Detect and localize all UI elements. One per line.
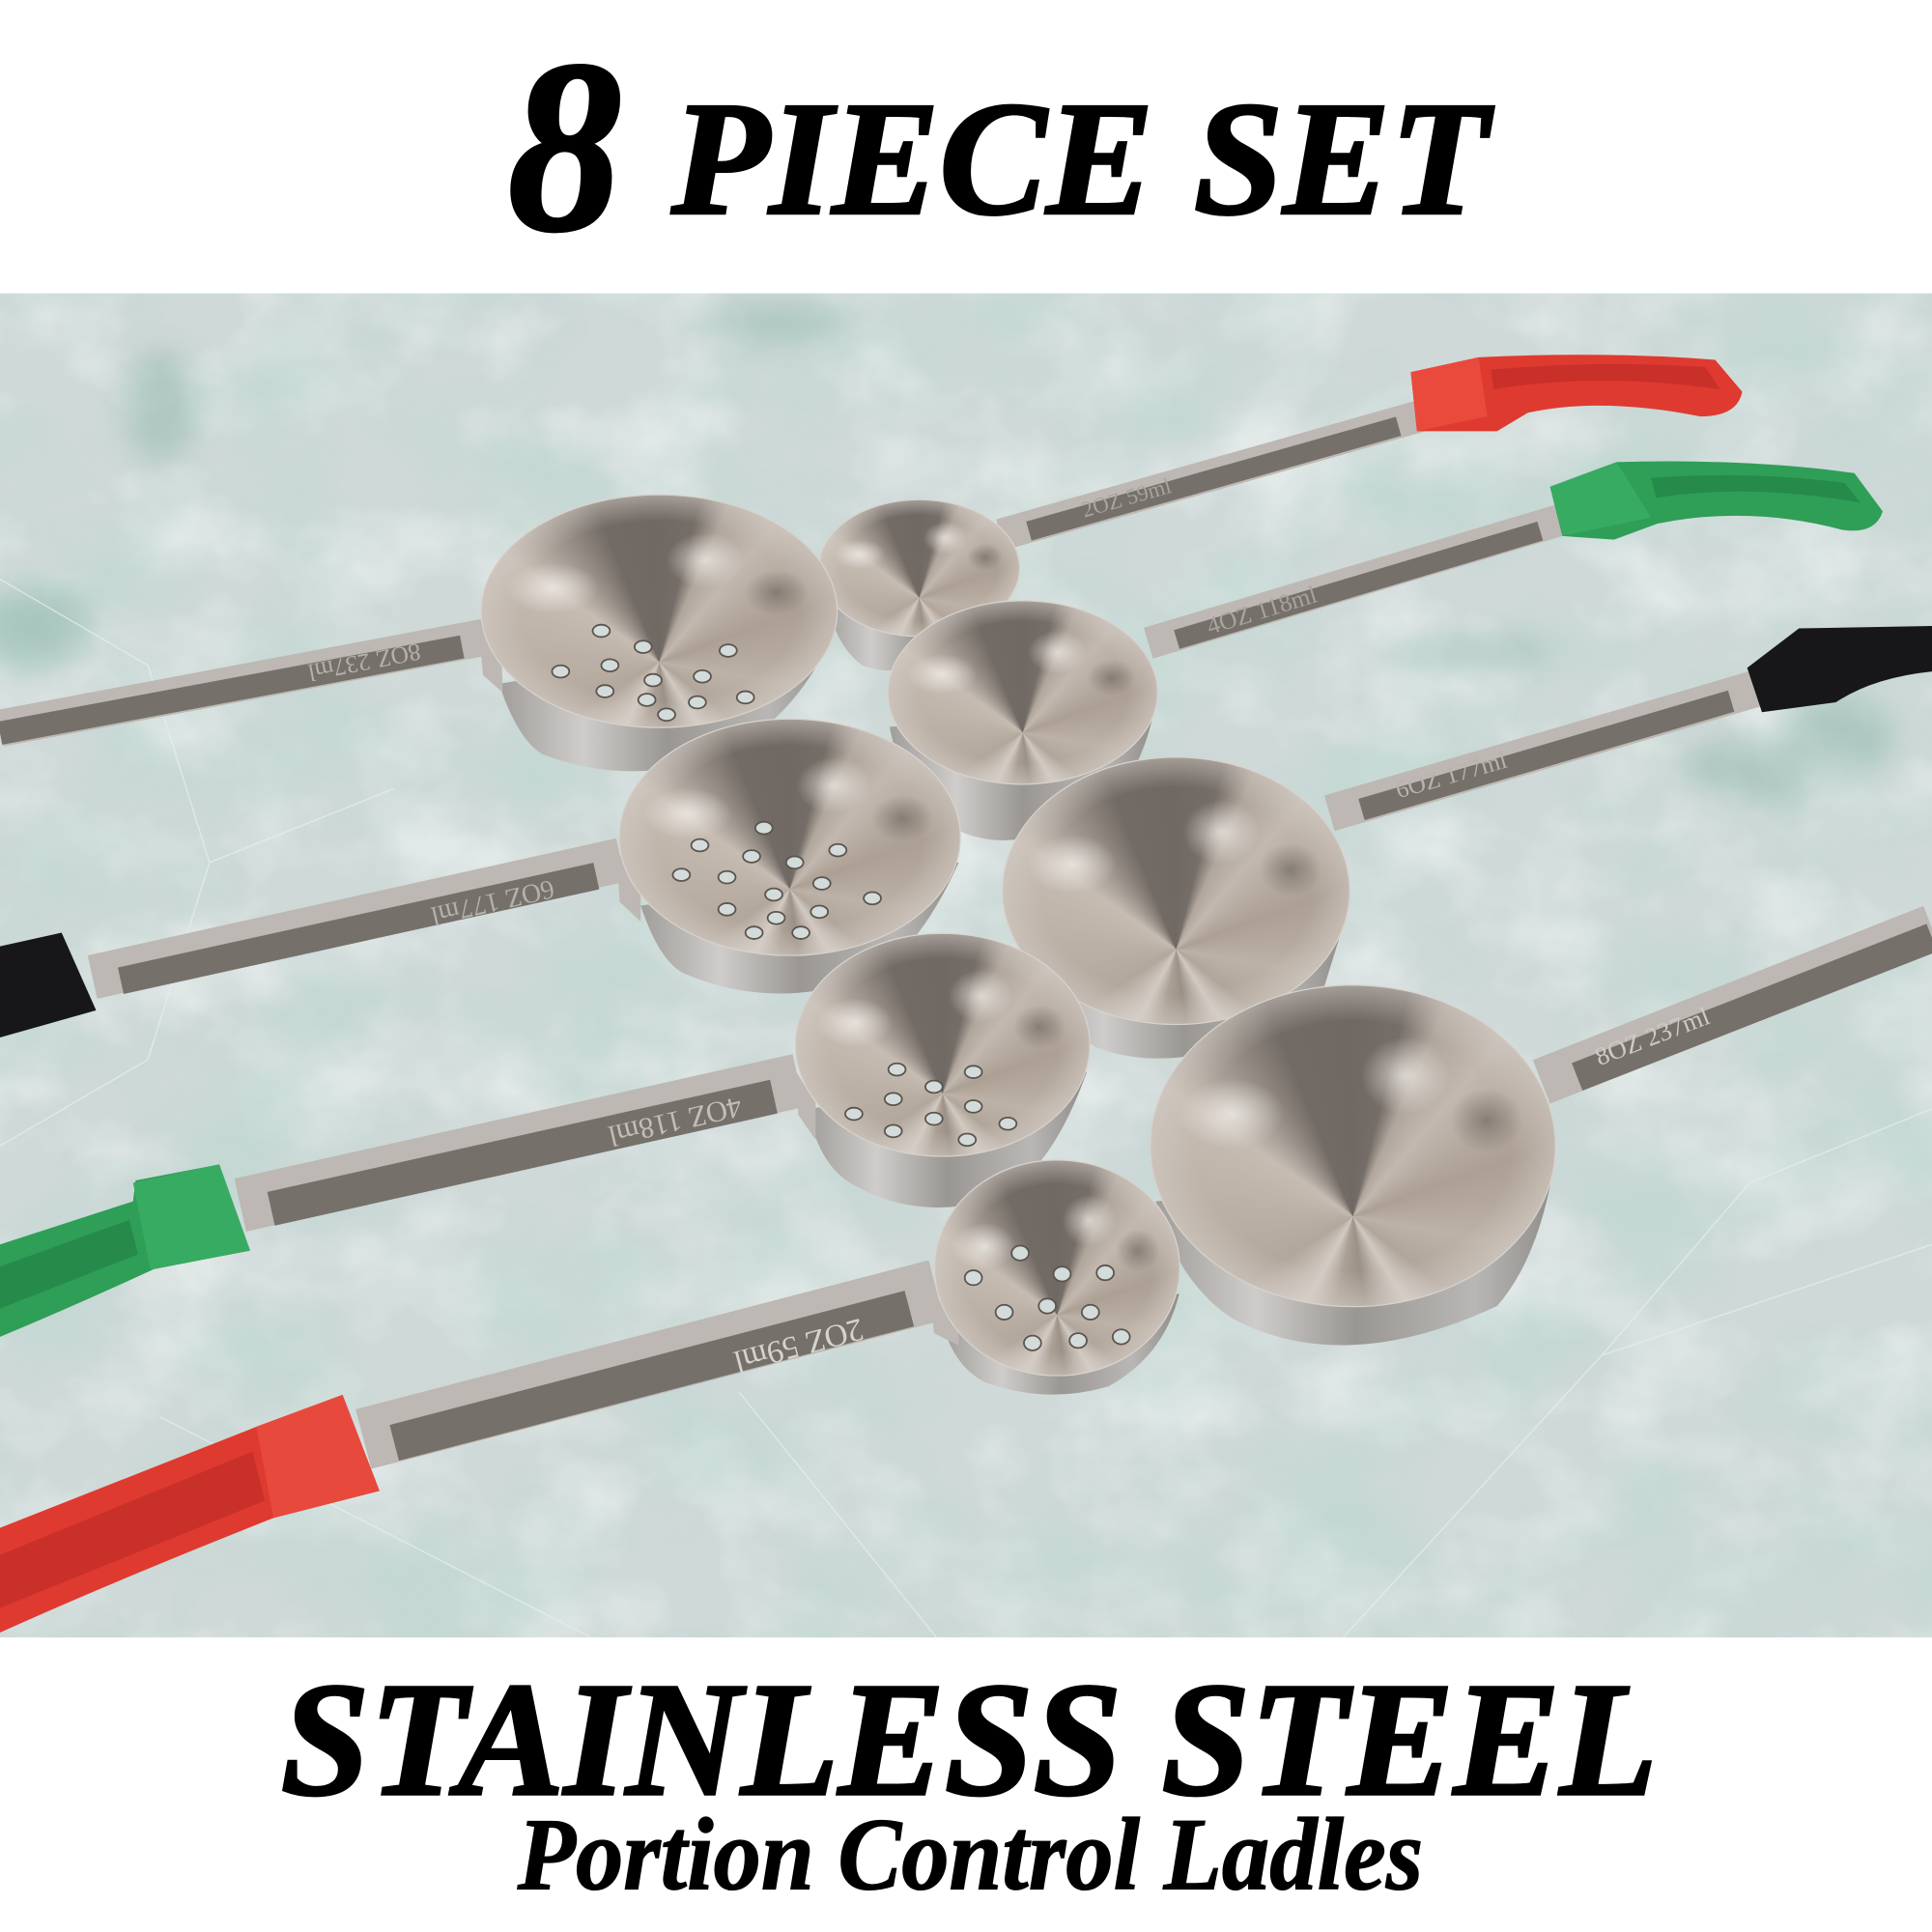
ladle: 2oz perforated, red handle	[0, 1159, 1180, 1633]
perforations	[552, 625, 754, 721]
perforations	[845, 1064, 1016, 1146]
perforations	[672, 822, 881, 939]
bowl body	[943, 1293, 1179, 1395]
subheading: portion control ladles: Portion Control Ladles	[517, 1798, 1423, 1912]
grip	[0, 933, 96, 1037]
ladle: 6oz solid, black handle	[1002, 626, 1932, 1059]
perforations	[965, 1246, 1130, 1350]
ladle: 4oz solid, green handle	[887, 462, 1883, 840]
ladle: 2oz solid, red handle	[818, 355, 1743, 670]
engraving: 6OZ 177ml	[1392, 746, 1510, 804]
bowl	[887, 600, 1158, 784]
bowl	[818, 499, 1020, 637]
bracket	[478, 622, 502, 693]
engraving: 2OZ 59ml	[1079, 473, 1174, 523]
handle	[93, 860, 621, 980]
engraving: 4OZ 118ml	[605, 1090, 745, 1152]
bowl body	[499, 629, 836, 771]
handle	[1329, 688, 1759, 813]
bowl body	[823, 579, 1016, 670]
bowl	[1150, 984, 1556, 1307]
heading: stainless steel: STAINLESS STEEL	[281, 1650, 1658, 1830]
ladle: 4oz perforated, green handle	[0, 933, 1091, 1337]
handle	[1149, 518, 1569, 643]
bowl body	[1155, 1158, 1555, 1346]
handle	[1001, 415, 1423, 535]
bowl	[618, 719, 961, 956]
grip	[1410, 355, 1743, 431]
ladle: 8oz solid, steel handle	[1150, 927, 1932, 1346]
bowl body	[807, 1072, 1087, 1208]
product photo panel: marble surface with ladles	[0, 294, 1932, 1638]
ladle: 8oz perforated, steel handle	[0, 494, 838, 771]
title: 8 piece set: PIECE SET	[670, 70, 1494, 249]
grip	[1747, 626, 1932, 712]
engraving: 8OZ 237ml	[1591, 1001, 1714, 1071]
title: 8 piece set: 8	[508, 11, 622, 283]
bowl body	[1023, 918, 1346, 1059]
bowl	[480, 494, 838, 728]
ladle: 6oz perforated, black handle	[0, 719, 961, 1037]
engraving: 6OZ 177ml	[428, 873, 557, 930]
handle	[0, 637, 486, 733]
grip	[1550, 462, 1883, 540]
bowl	[795, 933, 1091, 1157]
handle	[1542, 927, 1932, 1082]
bowl	[934, 1159, 1180, 1377]
bowl	[1002, 756, 1350, 1025]
bracket	[930, 1293, 958, 1346]
bracket	[616, 850, 640, 922]
engraving: 8OZ 237ml	[305, 638, 423, 687]
bowl body	[640, 863, 958, 993]
bowl body	[890, 702, 1155, 840]
handle	[363, 1290, 936, 1443]
engraving: 2OZ 59ml	[730, 1311, 867, 1379]
title: 8 piece set	[508, 11, 1494, 283]
engraving: 4OZ 118ml	[1204, 581, 1321, 640]
grip	[0, 1395, 380, 1633]
grip	[0, 1164, 250, 1337]
bracket	[795, 1069, 815, 1140]
handle	[241, 1081, 799, 1208]
